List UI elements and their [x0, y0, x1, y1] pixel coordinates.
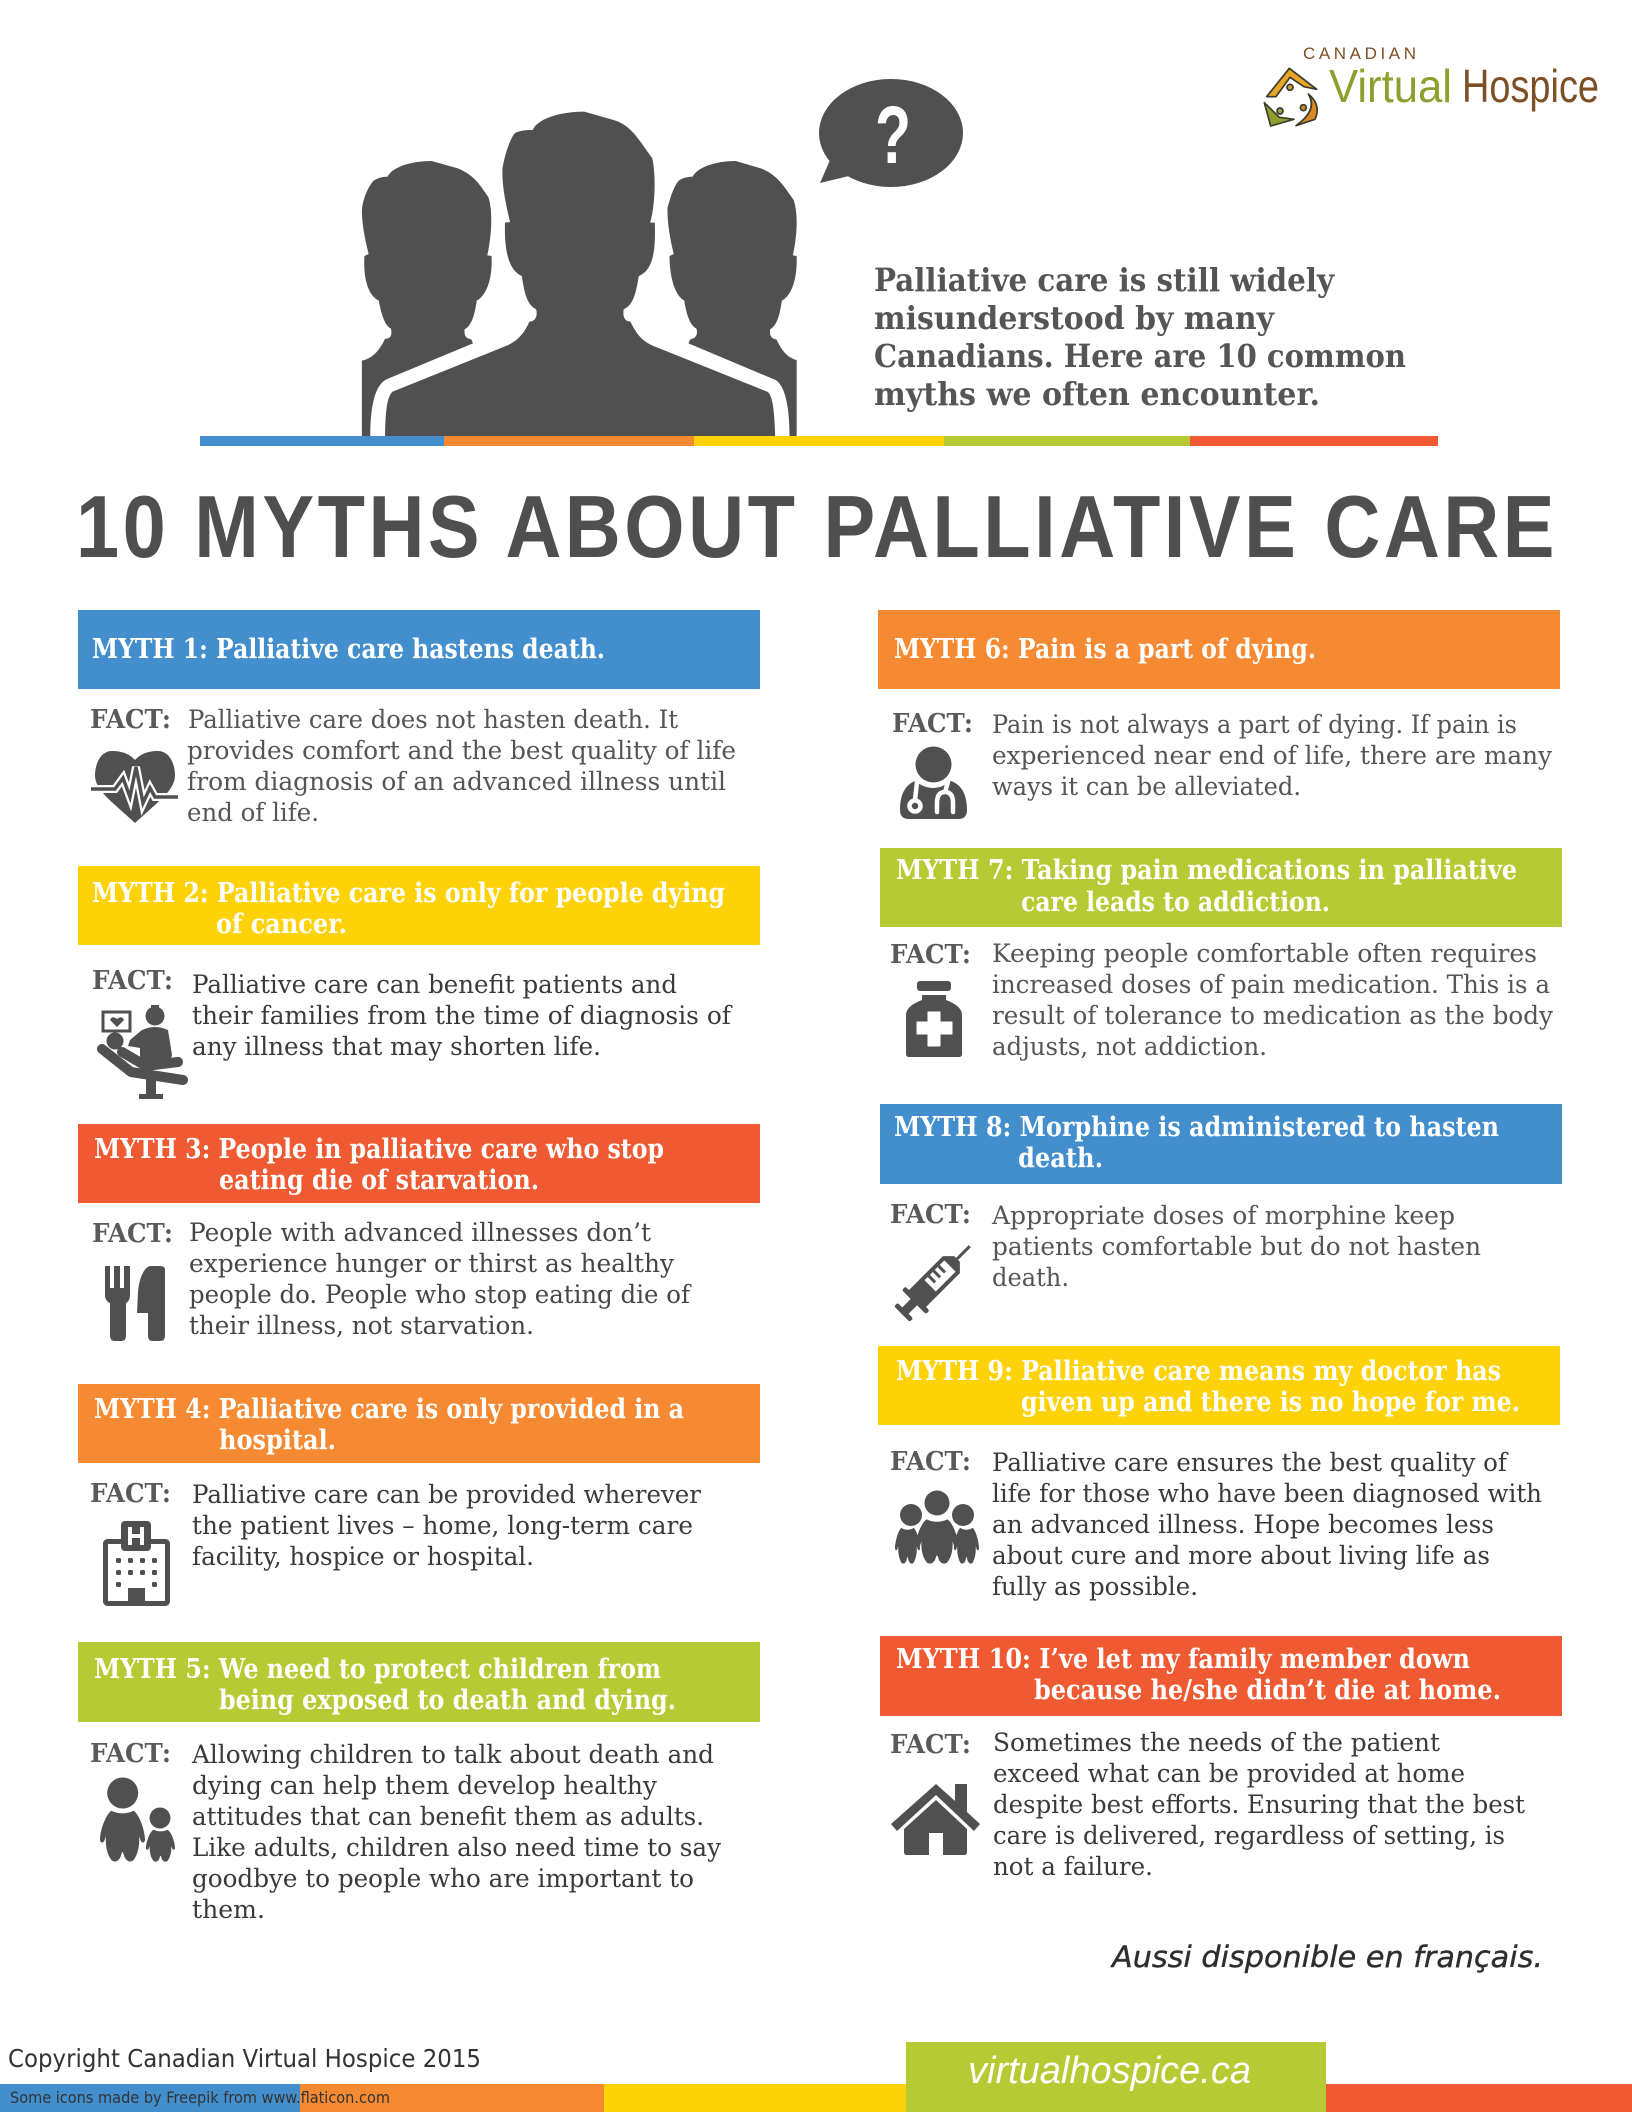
myth 10 fact: care is delivered, regardless of setting, is — [993, 1821, 1505, 1850]
icon: syringe — [890, 1234, 982, 1326]
colour rule — [200, 436, 1438, 446]
icon: hospital — [106, 1521, 168, 1604]
myth 10 banner: MYTH 10: I’ve let my family member down — [896, 1644, 1470, 1675]
myth 1 fact: end of life. — [187, 798, 319, 827]
icon: house — [891, 1784, 980, 1855]
myth 8 fact: FACT: — [890, 1200, 971, 1230]
myth 3 fact: people do. People who stop eating die of — [189, 1280, 692, 1309]
myth 4 banner — [78, 1384, 760, 1463]
myth 8 fact — [890, 1200, 1481, 1292]
myth 1 banner: MYTH 1: Palliative care hastens death. — [92, 634, 605, 665]
icon credit: Some icons made by Freepik from www.flaticon.com — [10, 2088, 390, 2107]
myth 3 fact: People with advanced illnesses don’t — [189, 1218, 651, 1247]
myth 7 fact: FACT: — [890, 940, 971, 970]
myth 5 fact: Like adults, children also need time to say — [192, 1833, 722, 1862]
myth 9 banner — [878, 1346, 1560, 1425]
myth 1 fact: FACT: — [90, 705, 171, 735]
myth 7 banner — [880, 848, 1562, 927]
panel: myth 9 — [878, 1346, 1560, 1601]
myth 2 fact: any illness that may shorten life. — [192, 1032, 601, 1061]
myth 6 banner — [878, 610, 1560, 689]
logo wordmark: CANADIAN — [1303, 44, 1416, 63]
myth 10 fact: despite best efforts. Ensuring that the best — [993, 1790, 1525, 1819]
myth 7 banner: MYTH 7: Taking pain medications in palliative — [896, 855, 1517, 886]
intro text: Palliative care is still widely — [874, 261, 1335, 299]
panel: myth 7 — [880, 848, 1562, 1061]
logo icon — [1264, 68, 1317, 126]
myth 9 fact: Palliative care ensures the best quality of — [992, 1448, 1509, 1477]
myth 2 fact — [92, 966, 733, 1061]
myth 9 fact: fully as possible. — [992, 1572, 1198, 1601]
panel: myth 3 — [78, 1124, 760, 1341]
note: French availability: Aussi disponible en français. — [1110, 1940, 1543, 1974]
myth 2 banner — [78, 866, 760, 945]
myth 4 fact: the patient lives – home, long-term care — [192, 1511, 693, 1540]
myth 1 banner — [78, 610, 760, 689]
myth 5 banner — [78, 1642, 760, 1722]
myth 5 fact — [90, 1739, 722, 1924]
panel: myth 8 — [880, 1104, 1562, 1326]
icon: medicine bottle — [906, 981, 962, 1057]
myth 1 fact: from diagnosis of an advanced illness until — [187, 767, 726, 796]
intro text: Canadians. Here are 10 common — [874, 337, 1406, 375]
myth 8 banner — [880, 1104, 1562, 1184]
intro text: misunderstood by many — [874, 299, 1275, 337]
myth 6 fact: Pain is not always a part of dying. If pain is — [992, 710, 1517, 739]
myth 10 fact: exceed what can be provided at home — [993, 1759, 1465, 1788]
myth 5 fact: goodbye to people who are important to — [192, 1864, 694, 1893]
logo wordmark: Hospice — [1462, 60, 1599, 112]
myth 7 fact — [890, 939, 1554, 1061]
myth 7 fact: result of tolerance to medication as the body — [992, 1001, 1554, 1030]
myth 5 fact: dying can help them develop healthy — [192, 1771, 658, 1800]
myth 4 banner: MYTH 4: Palliative care is only provided in a — [94, 1394, 684, 1425]
myth 4 fact — [90, 1479, 701, 1571]
logo wordmark — [1303, 44, 1599, 112]
myth 5 fact: attitudes that can benefit them as adults. — [192, 1802, 704, 1831]
panel: myth 5 — [78, 1642, 760, 1924]
myth 5 fact: FACT: — [90, 1739, 171, 1769]
myth 5 fact: them. — [192, 1895, 265, 1924]
intro text — [874, 261, 1406, 413]
myth 1 fact: Palliative care does not hasten death. It — [188, 705, 678, 734]
myth 4 fact: Palliative care can be provided wherever — [192, 1480, 701, 1509]
myth 6 fact: ways it can be alleviated. — [992, 772, 1301, 801]
myth 2 banner: MYTH 2: Palliative care is only for people dying — [92, 878, 725, 909]
copyright: Copyright Canadian Virtual Hospice 2015 — [8, 2044, 481, 2073]
myth 4 banner: hospital. — [219, 1425, 336, 1456]
myth 10 fact: not a failure. — [993, 1852, 1153, 1881]
myth 6 banner: MYTH 6: Pain is a part of dying. — [894, 634, 1316, 665]
icon: speech bubble with question mark — [819, 79, 963, 187]
myth 10 banner: because he/she didn’t die at home. — [1034, 1675, 1501, 1706]
panel: myth 4 — [78, 1384, 760, 1604]
myth 6 fact: FACT: — [892, 709, 973, 739]
myth 5 banner: MYTH 5: We need to protect children from — [94, 1654, 661, 1685]
footer colour bands — [0, 2084, 1632, 2112]
myth 8 fact: patients comfortable but do not hasten — [992, 1232, 1481, 1261]
icon: group of people — [895, 1490, 979, 1564]
myth 9 fact: an advanced illness. Hope becomes less — [992, 1510, 1494, 1539]
logo wordmark: Virtual — [1329, 60, 1452, 112]
myth 9 banner: given up and there is no hope for me. — [1021, 1387, 1520, 1418]
myth 4 fact: FACT: — [90, 1479, 171, 1509]
panel: myth 6 — [878, 610, 1560, 819]
myth 3 banner: MYTH 3: People in palliative care who stop — [94, 1134, 664, 1165]
intro text: myths we often encounter. — [874, 375, 1320, 413]
myth 3 fact: their illness, not starvation. — [189, 1311, 534, 1340]
logo: Canadian Virtual Hospice — [1264, 44, 1599, 126]
website badge: virtualhospice.ca — [968, 2050, 1251, 2092]
myth 2 fact: their families from the time of diagnosis of — [192, 1001, 733, 1030]
myth 6 fact — [892, 709, 1553, 801]
myth 2 banner: of cancer. — [216, 909, 347, 940]
myth 2 fact: FACT: — [92, 966, 173, 996]
icon: doctor — [900, 746, 967, 819]
myth 1 fact: provides comfort and the best quality of life — [187, 736, 736, 765]
panel: myth 2 — [78, 866, 760, 1099]
icon: heart with ECG — [88, 751, 181, 823]
myth 9 fact: life for those who have been diagnosed with — [992, 1479, 1542, 1508]
myth 8 banner: MYTH 8: Morphine is administered to hasten — [894, 1112, 1499, 1143]
myth 10 fact: Sometimes the needs of the patient — [993, 1728, 1440, 1757]
icon: speech bubble with question mark: ? — [875, 90, 911, 181]
myth 7 fact: adjusts, not addiction. — [992, 1032, 1267, 1061]
myth 7 fact: increased doses of pain medication. This is a — [992, 970, 1550, 999]
myth 6 fact: experienced near end of life, there are many — [992, 741, 1553, 770]
panel: myth 10 — [880, 1636, 1562, 1881]
icon: patient and doctor — [102, 1005, 183, 1099]
myth 3 fact — [92, 1218, 692, 1340]
myth 1 fact — [90, 705, 736, 827]
myth 10 fact — [890, 1728, 1525, 1881]
myth 9 fact: about cure and more about living life as — [992, 1541, 1490, 1570]
myth 8 fact: death. — [992, 1263, 1069, 1292]
myth 5 fact: Allowing children to talk about death and — [191, 1740, 714, 1769]
website badge — [906, 2042, 1326, 2112]
myth 9 banner: MYTH 9: Palliative care means my doctor has — [896, 1356, 1501, 1387]
myth 2 fact: Palliative care can benefit patients and — [192, 970, 677, 999]
myth 4 fact: facility, hospice or hospital. — [192, 1542, 534, 1571]
myth 7 fact: Keeping people comfortable often requires — [992, 939, 1537, 968]
myth 10 fact: FACT: — [890, 1730, 971, 1760]
myth 3 banner: eating die of starvation. — [219, 1165, 539, 1196]
myth 9 fact — [890, 1447, 1542, 1601]
myth 5 banner: being exposed to death and dying. — [219, 1685, 676, 1716]
myth 7 banner: care leads to addiction. — [1021, 887, 1330, 918]
icon: fork and knife — [105, 1266, 165, 1341]
myth 10 banner — [880, 1636, 1562, 1716]
myth 8 banner: death. — [1018, 1143, 1103, 1174]
myth 3 fact: FACT: — [92, 1219, 173, 1249]
myth 8 fact: Appropriate doses of morphine keep — [991, 1201, 1455, 1230]
myth 3 banner — [78, 1124, 760, 1203]
illustration: three silhouettes — [362, 112, 797, 436]
myth 9 fact: FACT: — [890, 1447, 971, 1477]
panel: myth 1 — [78, 610, 760, 827]
myth 3 fact: experience hunger or thirst as healthy — [189, 1249, 675, 1278]
icon: adult and child — [100, 1778, 175, 1862]
